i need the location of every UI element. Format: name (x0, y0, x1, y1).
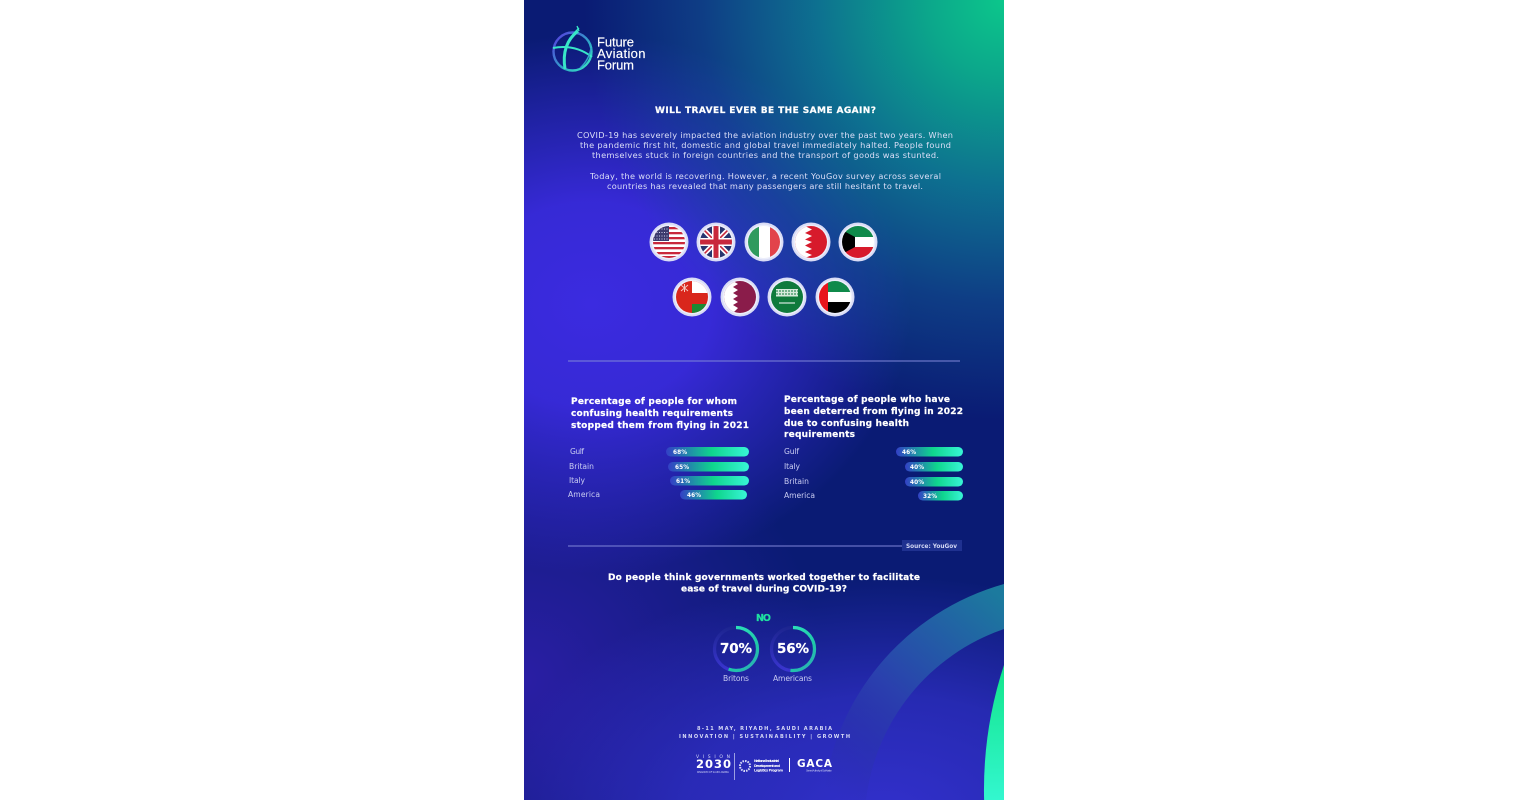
title: WILL TRAVEL EVER BE THE SAME AGAIN? (655, 106, 876, 116)
bar: Italy 40%: Italy (784, 462, 800, 471)
bar: Gulf 46%: 46% (902, 450, 916, 456)
bar: Italy 40% (784, 462, 963, 472)
flag: Qatar (720, 278, 760, 316)
flag: Italy (744, 222, 784, 262)
logo: National Industrial Development and Logistics Program: Development and (754, 764, 781, 768)
NO label: NO (756, 613, 771, 624)
left chart heading (571, 397, 749, 431)
intro text: countries has revealed that many passengers are still hesitant to travel. (607, 181, 923, 191)
bar: Britain 65%: Britain (569, 462, 594, 471)
donut: Britons 70%: Britons (723, 674, 749, 683)
flag: Bahrain (792, 222, 830, 262)
intro text (577, 130, 953, 191)
icon: globe with plane (553, 26, 592, 70)
logo: National Industrial Development and Logistics Program: National Industrial (754, 759, 779, 763)
intro text: the pandemic first hit, domestic and global travel immediately halted. People found (580, 140, 951, 150)
logo: Future Aviation Forum (553, 26, 646, 72)
bar: America 46%: 46% (687, 493, 701, 499)
bar: America 46%: America (568, 490, 600, 499)
logo wordmark: Forum (597, 58, 634, 72)
right chart: 2022 (784, 395, 963, 500)
donut: Britons 70% (714, 628, 758, 683)
logo: Vision 2030: 2030 (696, 757, 731, 771)
logo: National Industrial Development and Logistics Program: Logistics Program (754, 768, 783, 772)
donut: Americans 56%: 56% (777, 641, 809, 657)
right chart heading: requirements (784, 430, 855, 440)
logo wordmark: Future (597, 34, 634, 50)
flag: Kuwait (838, 222, 878, 262)
flag: USA (650, 222, 688, 262)
donut: Americans 56% (772, 628, 814, 683)
intro text: Today, the world is recovering. However, a recent YouGov survey across several (589, 171, 941, 181)
bar: Italy 40%: 40% (910, 465, 924, 471)
source label (902, 540, 962, 551)
bar: Britain 40%: Britain (784, 477, 809, 486)
bar: Italy 61% (569, 476, 749, 486)
left chart heading: stopped them from flying in 2021 (571, 421, 749, 431)
flag: UAE (816, 278, 854, 316)
logo: National Industrial Development and Logistics Program (740, 758, 790, 772)
right chart heading (784, 395, 963, 440)
flag: UK (696, 222, 736, 262)
bar: America 46% (568, 490, 747, 500)
left chart: 2021 (568, 397, 749, 500)
bar: America 32% (784, 491, 963, 500)
question heading: Do people think governments worked together to facilitate (608, 573, 920, 583)
bar: Britain 65%: 65% (675, 465, 689, 471)
logo: GACA: GACA (797, 758, 833, 770)
donut: Americans 56%: Americans (773, 674, 812, 683)
source label: Source: YouGov (906, 544, 957, 550)
logo wordmark (597, 34, 646, 72)
footer text: INNOVATION | SUSTAINABILITY | GROWTH (679, 734, 850, 740)
logo: Vision 2030 (696, 753, 735, 780)
intro text: themselves stuck in foreign countries and the transport of goods was stunted. (592, 150, 939, 160)
logo: GACA: General Authority of Civil Aviation (806, 770, 833, 772)
question heading: ease of travel during COVID-19? (681, 584, 847, 594)
decorative large arc band (823, 584, 1004, 800)
donut: Britons 70%: 70% (720, 641, 752, 657)
bar: America 32%: America (784, 491, 815, 500)
flags (650, 222, 878, 316)
right chart heading: Percentage of people who have (784, 395, 950, 405)
left chart heading: Percentage of people for whom (571, 397, 737, 407)
logo wordmark: Aviation (597, 46, 646, 61)
bar: America 32%: 32% (923, 494, 937, 500)
decorative mint arc (984, 665, 1004, 800)
bar: Gulf 68%: Gulf (570, 447, 584, 456)
flag: Oman (672, 278, 712, 316)
right chart heading: been deterred from flying in 2022 (784, 407, 963, 417)
intro text: COVID-19 has severely impacted the aviation industry over the past two years. When (577, 130, 953, 140)
left chart heading: confusing health requirements (571, 409, 733, 419)
bar: Britain 40%: 40% (910, 480, 924, 486)
footer text: 8-11 MAY, RIYADH, SAUDI ARABIA (697, 726, 832, 732)
sponsor logos (696, 753, 833, 780)
bar: Gulf 68% (570, 447, 749, 456)
bar: Britain 40% (784, 477, 963, 486)
bar: Gulf 68%: 68% (673, 450, 687, 456)
logo: Vision 2030: KINGDOM OF SAUDI ARABIA (697, 770, 729, 774)
bar: Italy 61%: 61% (676, 479, 690, 485)
bar: Britain 65% (569, 462, 749, 472)
bar: Gulf 46% (784, 447, 963, 456)
infographic panel (524, 0, 1004, 800)
right chart heading: due to confusing health (784, 419, 909, 429)
bar: Gulf 46%: Gulf (784, 447, 799, 456)
footer text (679, 726, 850, 740)
bar: Italy 61%: Italy (569, 476, 586, 485)
logo: Vision 2030: VISION (696, 754, 730, 760)
flag: Saudi Arabia (768, 278, 806, 316)
question heading (608, 573, 920, 594)
